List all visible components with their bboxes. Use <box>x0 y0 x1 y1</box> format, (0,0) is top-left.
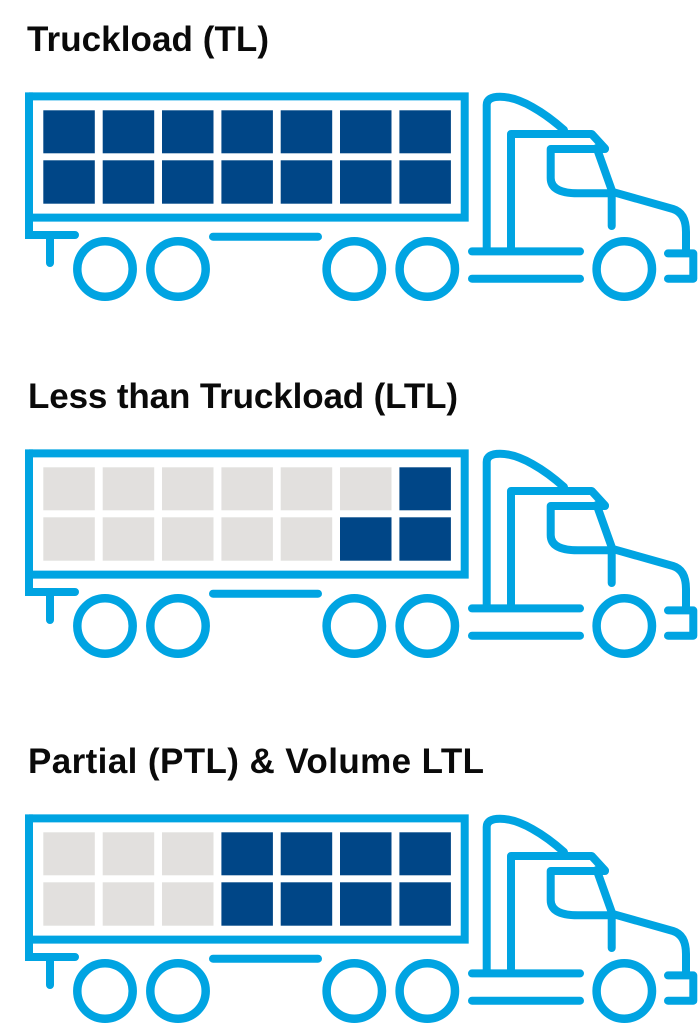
trailer <box>29 814 465 985</box>
truck: full load <box>29 92 693 297</box>
wheels <box>77 598 652 654</box>
cab <box>472 454 693 636</box>
trailer <box>29 92 465 263</box>
truck: small partial load <box>29 449 693 654</box>
section: Truckload <box>27 20 693 297</box>
wheels <box>77 241 652 297</box>
truck: larger partial load <box>29 814 693 1019</box>
section: Less than Truckload <box>28 377 693 654</box>
cab <box>472 819 693 1001</box>
trailer <box>29 449 465 620</box>
wheels <box>77 963 652 1019</box>
section: Partial and Volume LTL <box>28 742 693 1019</box>
cargo grid: 8 of 14 filled <box>43 832 451 926</box>
heading: Less than Truckload (LTL): Less than Truckload (LTL) <box>28 377 458 416</box>
heading: Partial (PTL) & Volume LTL: Partial (PTL) & Volume LTL <box>28 742 484 781</box>
heading: Truckload (TL): Truckload (TL) <box>27 20 269 59</box>
cab <box>472 97 693 279</box>
cargo grid: 3 of 14 filled <box>43 467 451 561</box>
cargo grid: 14 of 14 filled <box>43 110 451 204</box>
